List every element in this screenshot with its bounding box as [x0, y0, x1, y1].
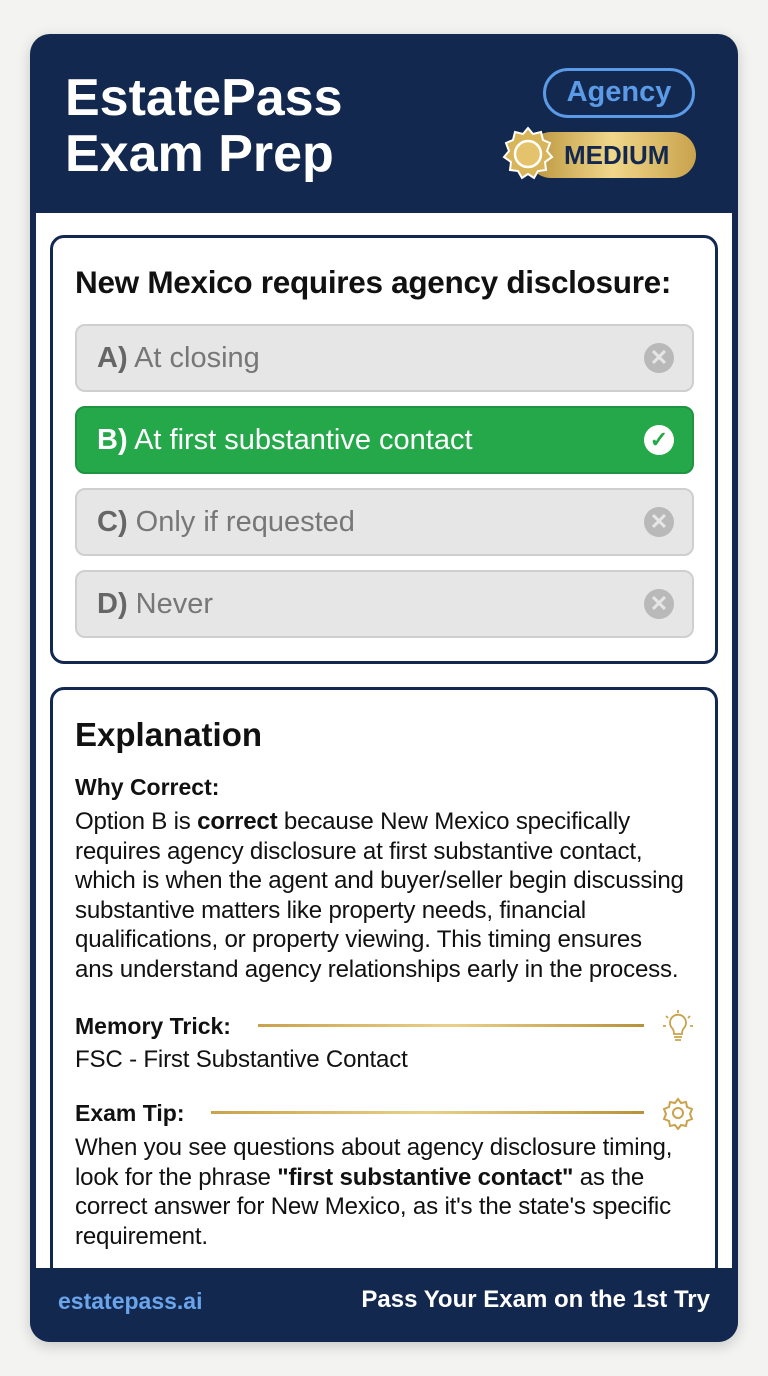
option B correct: [75, 406, 694, 474]
option D: ✕: [650, 591, 668, 616]
why correct text: substantive matters like property needs, financial: [75, 896, 586, 924]
option D: D) Never: [97, 588, 213, 620]
option B correct: B) At first substantive contact: [97, 424, 473, 456]
badge: agency: Agency: [567, 76, 671, 108]
option A: A) At closing: [97, 342, 260, 374]
option B correct: ✓: [650, 427, 668, 452]
option C: C) Only if requested: [97, 506, 355, 538]
exam tip text: look for the phrase "first substantive contact" as the: [75, 1164, 644, 1190]
memory trick text: FSC - First Substantive Contact: [75, 1046, 408, 1073]
exam tip text: When you see questions about agency disclosure timing,: [75, 1134, 672, 1161]
why correct text: requires agency disclosure at first substantive contact,: [75, 838, 642, 864]
panel: question: [50, 235, 718, 664]
panel: explanation: [50, 687, 718, 1327]
why correct text: which is when the agent and buyer/seller begin discussing: [75, 867, 684, 894]
icon: seal: [502, 126, 554, 180]
why correct heading: Why Correct:: [75, 774, 219, 800]
badge: agency: [543, 68, 695, 118]
exam tip text: [75, 1134, 672, 1250]
title: EstatePass: [65, 69, 343, 127]
body: [36, 213, 732, 1268]
memory trick heading: Memory Trick:: [75, 1013, 231, 1039]
exam tip text: requirement.: [75, 1222, 208, 1250]
footer url: estatepass.ai: [58, 1288, 202, 1314]
option D: [75, 570, 694, 638]
option A: [75, 324, 694, 392]
why correct text: qualifications, or property viewing. This timing ensures: [75, 926, 642, 953]
icon: lightbulb: [663, 1010, 693, 1041]
title: [65, 69, 343, 183]
question heading: New Mexico requires agency disclosure:: [75, 264, 671, 300]
footer: [30, 1268, 738, 1342]
why correct text: ans understand agency relationships early in the process.: [75, 956, 678, 982]
option A: ✕: [650, 345, 668, 370]
icon: gear: [662, 1098, 694, 1130]
exam tip text: correct answer for New Mexico, as it's the state's specific: [75, 1193, 671, 1220]
option C: ✕: [650, 509, 668, 534]
why correct text: [75, 808, 684, 982]
why correct text: Option B is correct because New Mexico specifically: [75, 808, 630, 835]
footer tagline: Pass Your Exam on the 1st Try: [361, 1286, 710, 1313]
title: Exam Prep: [65, 125, 334, 183]
exam tip heading: Exam Tip:: [75, 1100, 184, 1126]
header: [65, 68, 696, 183]
badge: medium: MEDIUM: [564, 140, 669, 170]
option C: [75, 488, 694, 556]
explanation heading: Explanation: [75, 716, 262, 753]
badge: medium: [502, 126, 696, 180]
